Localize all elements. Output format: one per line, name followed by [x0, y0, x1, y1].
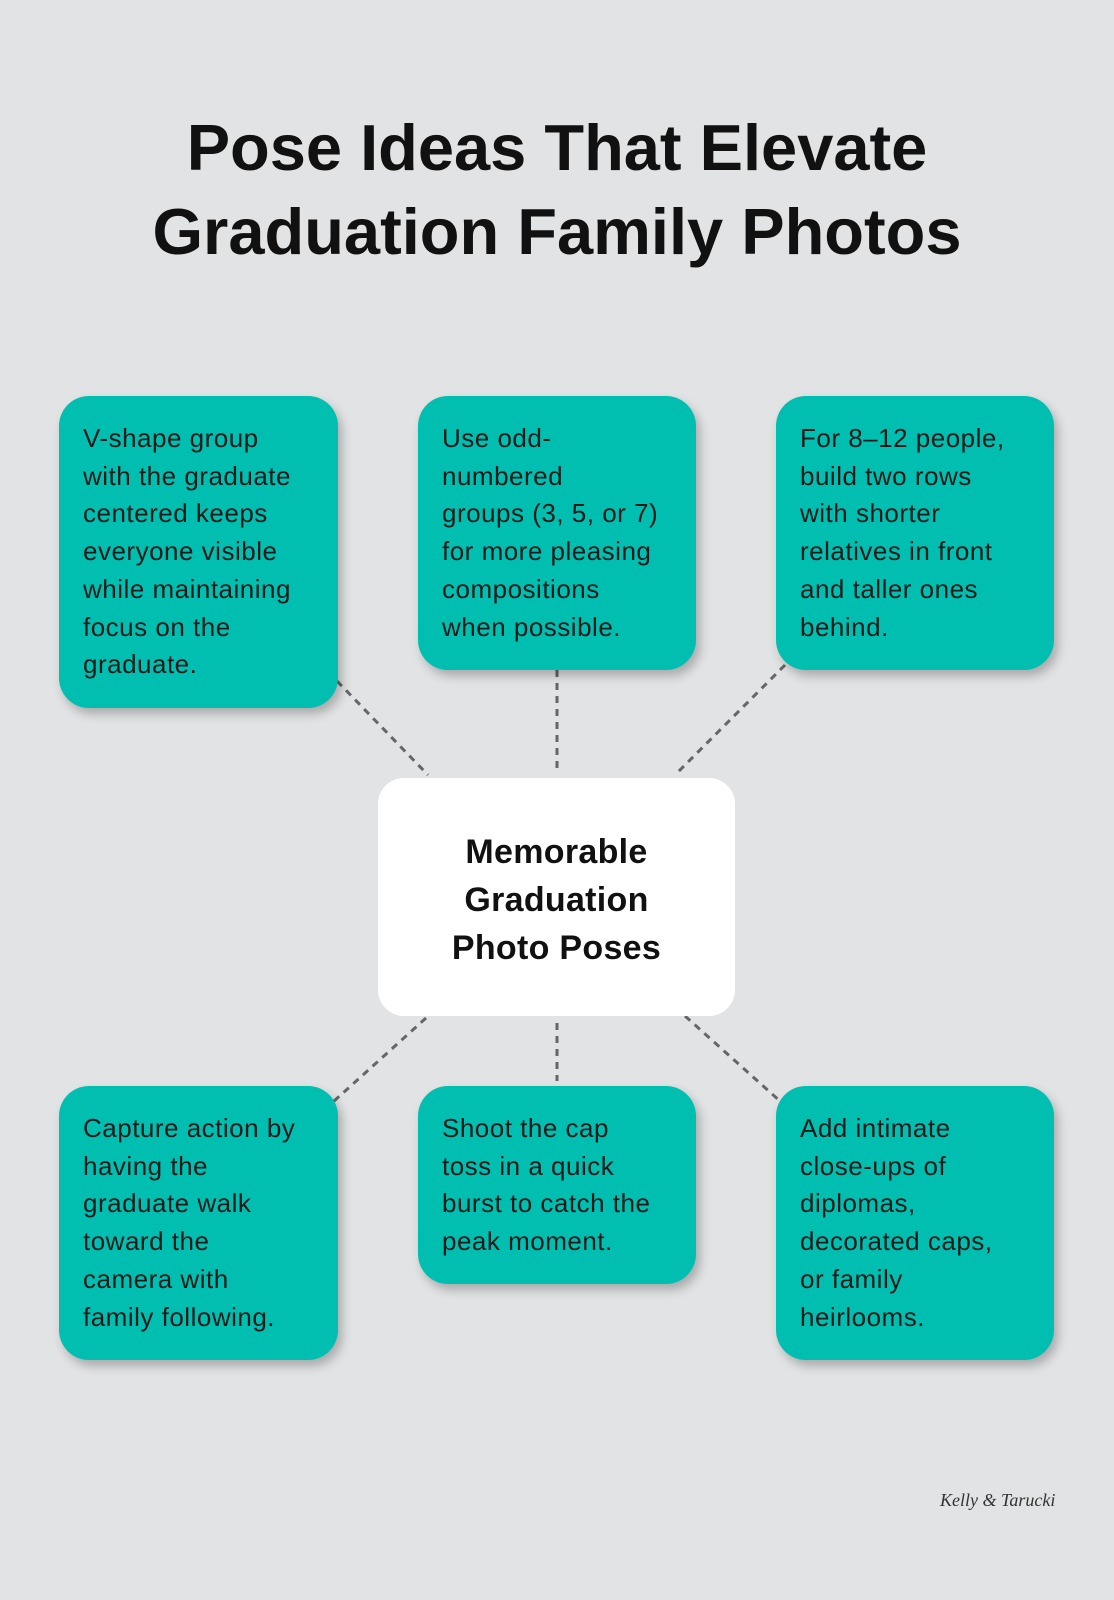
card: odd-numbered: for more pleasing	[442, 536, 651, 566]
title: Pose Ideas That Elevate	[187, 111, 927, 184]
card: V-shape: with the graduate	[83, 461, 291, 491]
card: V-shape: everyone visible	[83, 536, 277, 566]
card: capture action: Capture action by	[83, 1113, 295, 1143]
card: odd-numbered: when possible.	[442, 612, 621, 642]
card: odd-numbered: compositions	[442, 574, 600, 604]
card: cap toss: Shoot the cap	[442, 1113, 609, 1143]
center hub: Graduation	[464, 881, 649, 919]
card: close-ups	[776, 1086, 1054, 1360]
card: capture action: camera with	[83, 1264, 229, 1294]
card: V-shape: focus on the	[83, 612, 231, 642]
card: close-ups: close-ups of	[800, 1151, 946, 1181]
card: close-ups: decorated caps,	[800, 1226, 993, 1256]
card: cap toss: peak moment.	[442, 1226, 613, 1256]
card: odd-numbered: Use odd-	[442, 423, 552, 453]
title: Graduation Family Photos	[152, 195, 961, 268]
card: cap toss	[418, 1086, 696, 1284]
card: V-shape: graduate.	[83, 649, 197, 679]
card: two rows	[776, 396, 1054, 670]
center hub	[378, 778, 735, 1016]
card: two rows: with shorter	[800, 498, 940, 528]
card: capture action: having the	[83, 1151, 208, 1181]
card: capture action: family following.	[83, 1302, 275, 1332]
card: cap toss: toss in a quick	[442, 1151, 614, 1181]
card: two rows: For 8–12 people,	[800, 423, 1005, 453]
card: capture action: toward the	[83, 1226, 209, 1256]
card: odd-numbered: numbered	[442, 461, 563, 491]
card: two rows: behind.	[800, 612, 889, 642]
card: odd-numbered: groups (3, 5, or 7)	[442, 498, 658, 528]
card: close-ups: Add intimate	[800, 1113, 951, 1143]
card: V-shape: centered keeps	[83, 498, 268, 528]
card: close-ups: heirlooms.	[800, 1302, 925, 1332]
card: two rows: build two rows	[800, 461, 972, 491]
card: close-ups: diplomas,	[800, 1188, 916, 1218]
center hub: Memorable	[465, 833, 648, 871]
card: capture action: graduate walk	[83, 1188, 251, 1218]
center hub: Photo Poses	[452, 929, 661, 967]
card: capture action	[59, 1086, 338, 1360]
card: close-ups: or family	[800, 1264, 903, 1294]
card: odd-numbered	[418, 396, 696, 670]
logo signature: Kelly & Tarucki	[940, 1490, 1055, 1510]
card: two rows: relatives in front	[800, 536, 993, 566]
card: V-shape	[59, 396, 338, 708]
card: two rows: and taller ones	[800, 574, 978, 604]
card: V-shape: while maintaining	[83, 574, 291, 604]
card: V-shape: V-shape group	[83, 423, 259, 453]
title	[152, 111, 961, 268]
card: cap toss: burst to catch the	[442, 1188, 650, 1218]
